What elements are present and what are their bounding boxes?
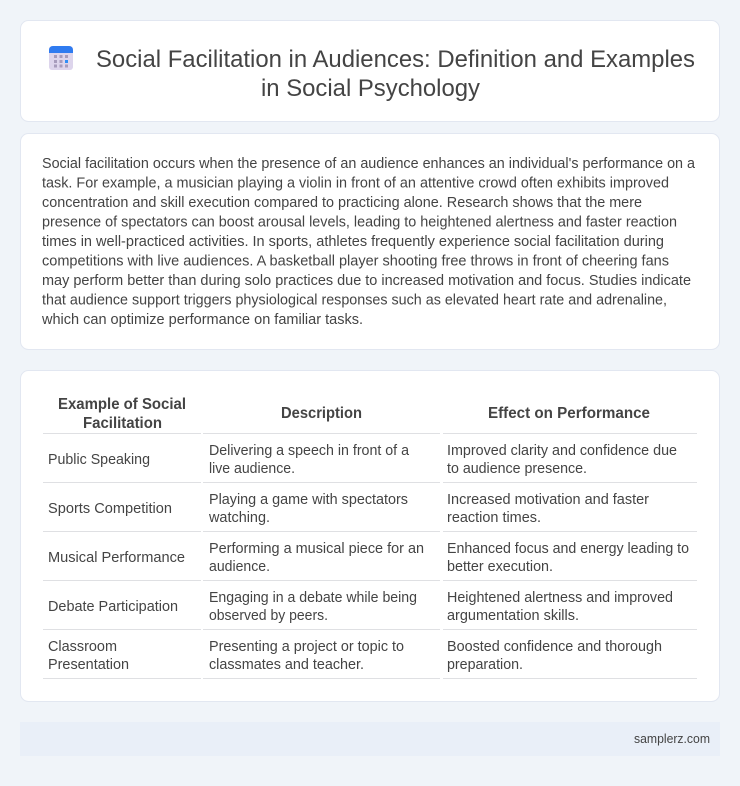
paragraph text: competitions with live audiences. A basketball player shooting free throws in front of cheering fans — [42, 254, 669, 270]
row: musical performance: Enhanced focus and energy leading to — [447, 541, 689, 557]
row: musical performance — [48, 541, 689, 575]
row: musical performance: Musical Performance — [48, 550, 185, 566]
icon: calendar — [49, 46, 73, 70]
title: Social Facilitation in Audiences: Definition and Examples — [96, 46, 695, 73]
row: classroom presentation: Boosted confidence and thorough — [447, 639, 662, 655]
paragraph text: which can optimize performance on familiar tasks. — [41, 312, 363, 328]
title — [96, 46, 695, 102]
paragraph text — [41, 156, 695, 328]
row: debate participation: Heightened alertness and improved — [447, 590, 673, 606]
row: sports competition: watching. — [208, 510, 270, 526]
row: musical performance: audience. — [209, 559, 270, 575]
table header: Description — [281, 405, 362, 422]
row: sports competition: Increased motivation and faster — [447, 492, 649, 508]
row: debate participation: argumentation skills. — [447, 608, 579, 624]
row: classroom presentation: Presenting a project or topic to — [209, 639, 404, 655]
row: classroom presentation: Classroom — [48, 639, 117, 655]
paragraph text: times in well-practiced activities. In sports, athletes frequently experience social facilitation during — [42, 234, 664, 250]
row: debate participation — [48, 590, 673, 624]
row: sports competition: Playing a game with spectators — [209, 492, 408, 508]
panel: examples table — [20, 370, 720, 702]
paragraph text: concentration and skill execution compared to practicing alone. Research shows that the mere — [42, 195, 642, 211]
table header — [58, 396, 650, 432]
row: sports competition: Sports Competition — [48, 501, 172, 517]
paragraph text: presence of spectators can boost arousal levels, leading to heightened alertness and faster reaction — [42, 214, 677, 230]
row: public speaking: to audience presence. — [447, 461, 587, 477]
panel: intro paragraph — [20, 134, 720, 350]
row: public speaking: live audience. — [209, 461, 295, 477]
panel: title card — [20, 20, 720, 122]
paragraph text: may perform better than during solo practices due to increased motivation and focus. Studies indicate — [42, 273, 691, 289]
table header: Facilitation — [83, 415, 162, 432]
row: classroom presentation — [48, 639, 662, 673]
footer bar — [20, 722, 720, 756]
row: public speaking: Improved clarity and confidence due — [447, 443, 677, 459]
paragraph text: Social facilitation occurs when the presence of an audience enhances an individual's performance on a — [42, 156, 695, 172]
table header: Effect on Performance — [488, 405, 650, 422]
row: classroom presentation: Presentation — [48, 657, 129, 673]
title: in Social Psychology — [261, 75, 480, 102]
row: sports competition: reaction times. — [447, 510, 541, 526]
table header: Example of Social — [58, 396, 186, 413]
row: musical performance: better execution. — [447, 559, 553, 575]
paragraph text: that audience support triggers physiological responses such as elevated heart rate and adrenaline, — [42, 292, 667, 308]
footer text: samplerz.com — [634, 732, 710, 746]
row: classroom presentation: preparation. — [447, 657, 523, 673]
row: public speaking: Public Speaking — [48, 452, 150, 468]
row: debate participation: observed by peers. — [209, 608, 328, 624]
row: debate participation: Debate Participation — [48, 599, 178, 615]
row: debate participation: Engaging in a debate while being — [209, 590, 417, 606]
paragraph text: task. For example, a musician playing a violin in front of an attentive crowd often exhibits improved — [42, 176, 669, 192]
row: sports competition — [48, 492, 649, 526]
row: musical performance: Performing a musical piece for an — [209, 541, 424, 557]
row: public speaking: Delivering a speech in front of a — [209, 443, 409, 459]
row: public speaking — [48, 443, 677, 477]
row: classroom presentation: classmates and teacher. — [209, 657, 364, 673]
